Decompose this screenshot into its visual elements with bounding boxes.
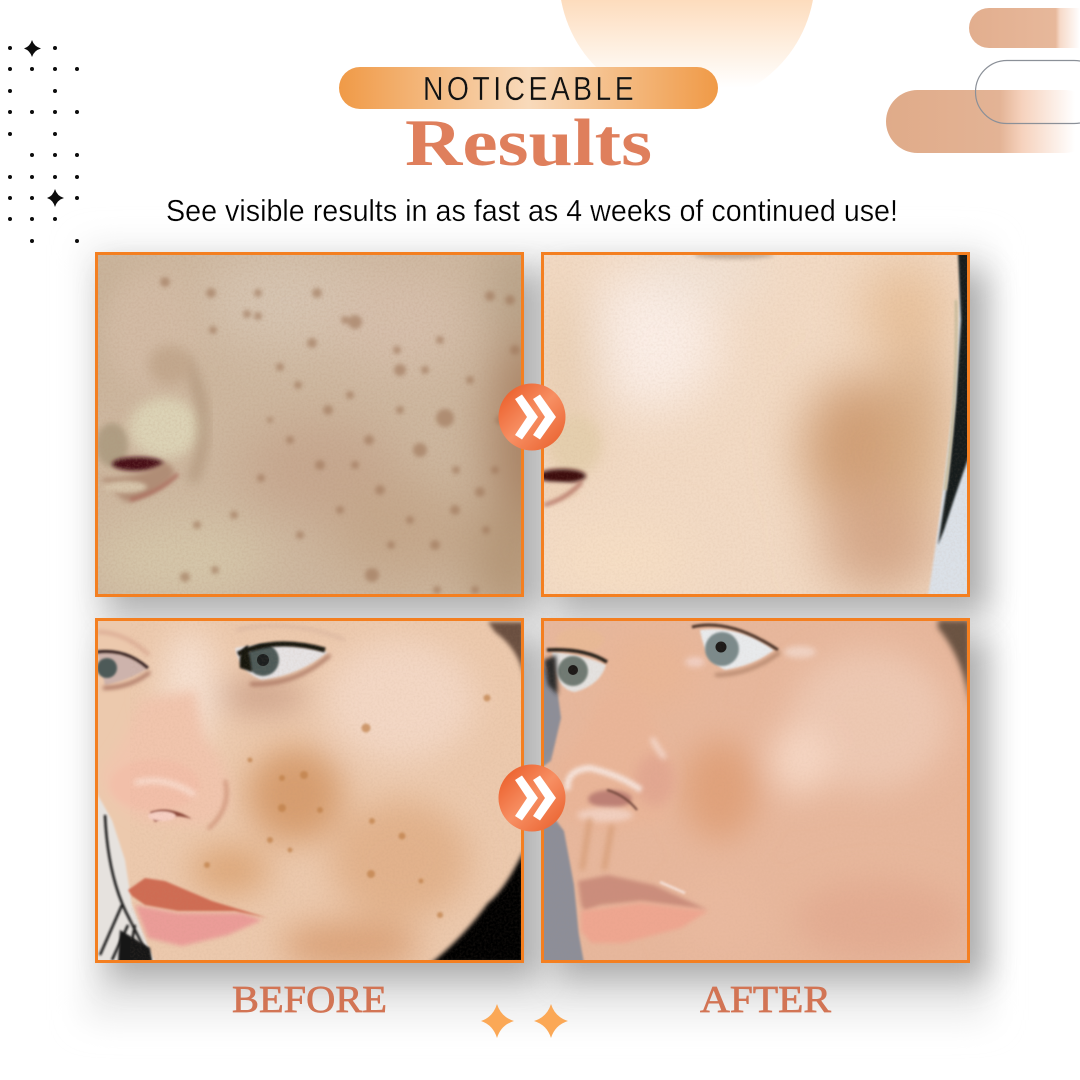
- decorative fading circle: [559, 0, 815, 105]
- freckles: [160, 277, 520, 594]
- skin grain: [541, 618, 970, 963]
- hair: [938, 620, 970, 710]
- background and hair: [95, 622, 524, 963]
- frame: top-right: [542, 254, 968, 596]
- freckles: [204, 694, 490, 918]
- skin grain: [102, 256, 466, 590]
- photo shadows: [108, 272, 987, 980]
- subtitle: See visible results in as fast as 4 weeks of continued use!: [166, 193, 898, 228]
- arrow: bottom pair: [498, 764, 566, 832]
- decorative pill: top right: [969, 8, 1080, 48]
- nose: [96, 270, 203, 502]
- panel: top-left before photo: [98, 255, 521, 594]
- panel: bottom-right after photo: [541, 618, 970, 963]
- arrow: top pair: [498, 384, 566, 450]
- skin grain: [541, 252, 970, 597]
- label: after: AFTER: [700, 979, 832, 1021]
- hair and background edge: [694, 251, 975, 597]
- icon: orange sparkles: [481, 1004, 568, 1038]
- pill label: NOTICEABLE: [423, 70, 637, 108]
- nose: [102, 690, 229, 829]
- soft halo behind photos: [85, 245, 990, 1020]
- frame: bottom-right: [542, 620, 968, 962]
- nose and nostril: [544, 421, 600, 509]
- title: Results: [405, 106, 652, 180]
- panel: bottom-left before photo: [95, 618, 524, 970]
- background: [541, 660, 584, 963]
- decorative dot grid with stars: [8, 40, 79, 243]
- frame: top-left: [96, 254, 522, 596]
- lips: [578, 875, 708, 943]
- eyes: [544, 625, 816, 695]
- frame: bottom-left: [96, 620, 522, 962]
- panel: top-right after photo: [532, 245, 975, 597]
- decorative pill: outlined: [976, 60, 1080, 124]
- label: before: BEFORE: [232, 979, 387, 1021]
- header pill: [339, 67, 718, 109]
- decorative pill: large right: [886, 90, 1080, 153]
- lips: [128, 878, 268, 946]
- eyes: [97, 626, 345, 688]
- skin grain: [130, 618, 524, 963]
- nose: [549, 736, 671, 871]
